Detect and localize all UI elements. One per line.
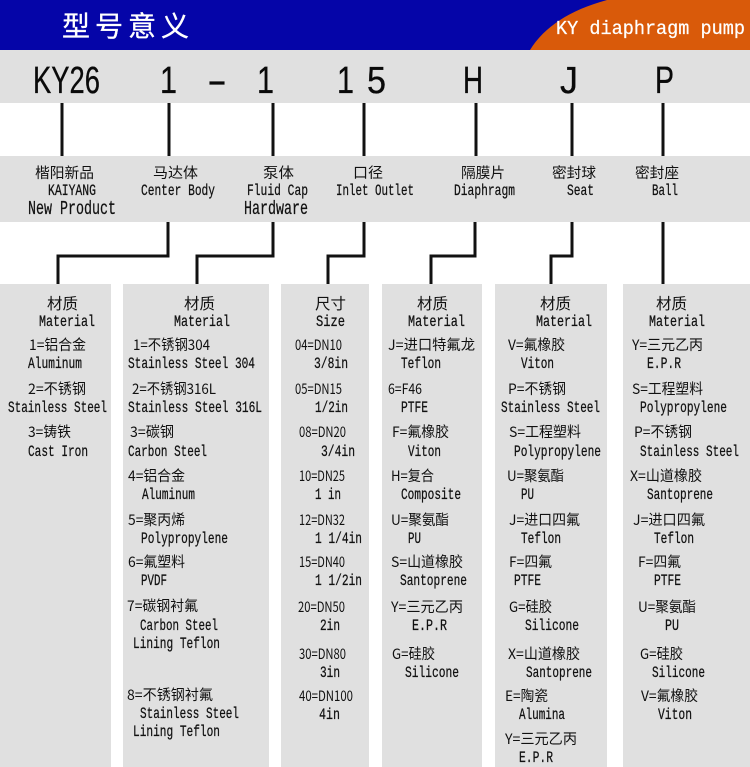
label: seat	[552, 162, 597, 200]
model code band: J	[560, 60, 578, 102]
panel: seat material: Alumina	[519, 706, 565, 724]
label: center body: 马达体	[153, 162, 199, 183]
panel: seat material: Y=三元乙丙	[504, 728, 577, 749]
panel: diaphragm material: S=山道橡胶	[391, 551, 463, 572]
panel: center body material	[0, 284, 111, 767]
panel: seat material: E.P.R	[519, 749, 553, 767]
panel: size: 1 in	[315, 486, 341, 504]
panel: ball material: Y=三元乙丙	[631, 334, 703, 355]
panel: diaphragm material: Composite	[401, 486, 461, 504]
label: fluid cap	[244, 162, 308, 220]
panel: ball material: V=氟橡胶	[641, 685, 698, 706]
panel: diaphragm material: E.P.R	[412, 617, 447, 635]
panel: seat material: F=四氟	[509, 551, 552, 572]
title: 型号意义	[62, 5, 189, 45]
panel: fluid cap material: 2=不锈钢316L	[132, 378, 216, 399]
panel: center body material: Cast Iron	[28, 443, 88, 461]
panel: fluid cap material: Carbon Steel	[140, 617, 218, 635]
panel: seat material: E=陶瓷	[505, 685, 548, 706]
panel: fluid cap material: 材质	[184, 292, 215, 314]
label: fluid cap: Fluid Cap	[247, 182, 308, 200]
panel: center body material: 2=不锈钢	[28, 378, 86, 399]
label: diaphragm: 隔膜片	[461, 162, 505, 183]
model code band: -	[207, 60, 227, 102]
component label band	[0, 156, 750, 222]
panel: size: 20=DN50	[298, 596, 345, 617]
panel: ball material: Material	[649, 313, 705, 331]
label: ball: Ball	[652, 182, 678, 200]
panel: size: 05=DN15	[295, 378, 342, 399]
panel: size: 08=DN20	[299, 421, 346, 442]
panel: fluid cap material: PVDF	[141, 572, 167, 590]
panel: seat material: Stainless Steel	[501, 399, 600, 417]
panel: size: 3/8in	[314, 355, 348, 373]
panel: ball material: Viton	[658, 706, 692, 724]
panel: seat material: J=进口四氟	[509, 509, 580, 530]
panel: fluid cap material: Polypropylene	[141, 530, 228, 548]
panel: center body material: Aluminum	[28, 355, 82, 373]
panel: fluid cap material: Stainless Steel 304	[128, 355, 255, 373]
panel: seat material: V=氟橡胶	[508, 334, 565, 355]
panel: fluid cap material: Stainless Steel	[140, 705, 239, 723]
panel: ball material: PTFE	[654, 572, 681, 590]
panel: diaphragm material: Y=三元乙丙	[390, 596, 463, 617]
panel: size: Size	[316, 313, 345, 331]
panel: diaphragm material: PTFE	[401, 399, 428, 417]
panel: fluid cap material: 6=氟塑料	[128, 551, 185, 572]
panel: fluid cap material: 8=不锈钢衬氟	[127, 684, 213, 705]
panel: size: 12=DN32	[299, 509, 345, 530]
label: diaphragm	[454, 162, 515, 200]
panel: size: 1 1/2in	[315, 572, 362, 590]
model code band	[0, 50, 750, 103]
panel: diaphragm material: Santoprene	[400, 572, 467, 590]
panel: fluid cap material: 7=碳钢衬氟	[127, 595, 198, 616]
panel: diaphragm material: 材质	[417, 292, 448, 314]
panel: ball material: Silicone	[652, 664, 705, 682]
label: fluid cap: 泵体	[263, 162, 295, 183]
model code band: H	[463, 60, 483, 102]
model code band: KY26	[33, 60, 100, 102]
panel: fluid cap material: 5=聚丙烯	[128, 509, 185, 530]
panel: size: 30=DN80	[299, 643, 346, 664]
panel: fluid cap material: 1=不锈钢304	[133, 334, 210, 355]
label: inlet outlet: Inlet Outlet	[336, 182, 414, 200]
label: ball	[635, 162, 679, 200]
connector lines: labels to panels	[58, 222, 663, 284]
model code band: 5	[367, 60, 386, 102]
panel: size: 1/2in	[315, 399, 348, 417]
label: new product: 楷阳新品	[35, 162, 94, 183]
panel: size	[281, 284, 369, 767]
panel: seat material: Teflon	[521, 530, 561, 548]
model code band: 1	[160, 60, 177, 102]
label: seat: 密封球	[552, 162, 597, 183]
label: ball: 密封座	[635, 162, 679, 183]
panel: diaphragm material: Silicone	[405, 664, 459, 682]
panel: diaphragm material: 6=F46	[388, 378, 422, 399]
subtitle: KY diaphragm pump	[556, 18, 745, 40]
panel: fluid cap material: Material	[174, 313, 230, 331]
panel: size: 2in	[320, 617, 340, 635]
model code band: 1	[337, 60, 354, 102]
panel: fluid cap material	[123, 284, 269, 767]
panel: ball material: Teflon	[654, 530, 694, 548]
panel: seat material: Santoprene	[526, 664, 592, 682]
panel: ball material: Santoprene	[647, 486, 713, 504]
panel: seat material: Polypropylene	[514, 443, 601, 461]
label: new product	[28, 162, 116, 220]
panel: diaphragm material: U=聚氨酯	[391, 509, 449, 530]
panel: ball material	[623, 284, 750, 767]
label: center body	[141, 162, 215, 200]
panel: seat material	[495, 284, 607, 767]
panel: ball material: F=四氟	[638, 551, 681, 572]
panel: seat material: X=山道橡胶	[508, 643, 580, 664]
panel: center body material: 1=铝合金	[29, 334, 86, 355]
panel: diaphragm material: Material	[408, 313, 465, 331]
panel: ball material: X=山道橡胶	[630, 465, 702, 486]
panel: fluid cap material: Carbon Steel	[128, 443, 207, 461]
panel: size: 尺寸	[315, 292, 346, 314]
panel: diaphragm material: J=进口特氟龙	[388, 334, 475, 355]
label: fluid cap: Hardware	[244, 198, 308, 220]
header banner	[0, 0, 750, 50]
panel: ball material: J=进口四氟	[633, 509, 705, 530]
connector lines: code to labels	[62, 103, 663, 156]
panel: fluid cap material: Aluminum	[142, 486, 195, 504]
panel: diaphragm material: Teflon	[401, 355, 441, 373]
panel: fluid cap material: 3=碳钢	[130, 421, 174, 442]
panel: size: 4in	[319, 706, 340, 724]
panel: ball material: U=聚氨酯	[638, 596, 696, 617]
label: seat: Seat	[567, 182, 594, 200]
panel: center body material: Stainless Steel	[8, 399, 107, 417]
panel: diaphragm material: Viton	[408, 443, 441, 461]
panel: fluid cap material: Stainless Steel 316L	[128, 399, 262, 417]
panel: ball material: S=工程塑料	[632, 378, 703, 399]
panel: seat material: PU	[521, 486, 534, 504]
panel: seat material: S=工程塑料	[509, 421, 581, 442]
model code band: 1	[257, 60, 274, 102]
panel: size: 15=DN40	[299, 551, 345, 572]
panel: diaphragm material: G=硅胶	[392, 643, 435, 664]
panel: diaphragm material	[382, 284, 482, 767]
label: inlet outlet: 口径	[353, 162, 383, 183]
label: center body: Center Body	[141, 182, 215, 200]
panel: size: 3/4in	[321, 443, 355, 461]
panel: seat material: G=硅胶	[509, 596, 552, 617]
panel: ball material: 材质	[656, 292, 687, 314]
label: new product: KAIYANG	[48, 182, 96, 200]
panel: diaphragm material: PU	[408, 530, 421, 548]
model code band: P	[655, 60, 674, 102]
panel: size: 3in	[320, 664, 340, 682]
label: diaphragm: Diaphragm	[454, 182, 515, 200]
panel: size: 1 1/4in	[315, 530, 362, 548]
panel: ball material: E.P.R	[647, 355, 681, 373]
panel: size: 10=DN25	[299, 465, 345, 486]
panel: fluid cap material: 4=铝合金	[128, 465, 185, 486]
panel: fluid cap material: Lining Teflon	[133, 723, 220, 741]
panel: center body material: 材质	[47, 292, 78, 314]
panel: seat material: 材质	[540, 292, 571, 314]
panel: seat material: P=不锈钢	[508, 378, 566, 399]
panel: size: 40=DN100	[299, 685, 353, 706]
panel: center body material: Material	[39, 313, 95, 331]
panel: seat material: Material	[536, 313, 592, 331]
label: new product: New Product	[28, 198, 116, 220]
panel: fluid cap material: Lining Teflon	[133, 635, 220, 653]
panel: seat material: Silicone	[525, 617, 579, 635]
panel: ball material: G=硅胶	[640, 643, 683, 664]
panel: seat material: Viton	[521, 355, 554, 373]
panel: diaphragm material: F=氟橡胶	[392, 421, 449, 442]
panel: seat material: PTFE	[514, 572, 541, 590]
panel: ball material: P=不锈钢	[634, 421, 692, 442]
label: inlet outlet	[336, 162, 414, 200]
panel: diaphragm material: H=复合	[391, 465, 434, 486]
panel: ball material: PU	[665, 617, 679, 635]
panel: size: 04=DN10	[295, 334, 342, 355]
panel: center body material: 3=铸铁	[28, 421, 71, 442]
panel: seat material: U=聚氨酯	[507, 465, 564, 486]
